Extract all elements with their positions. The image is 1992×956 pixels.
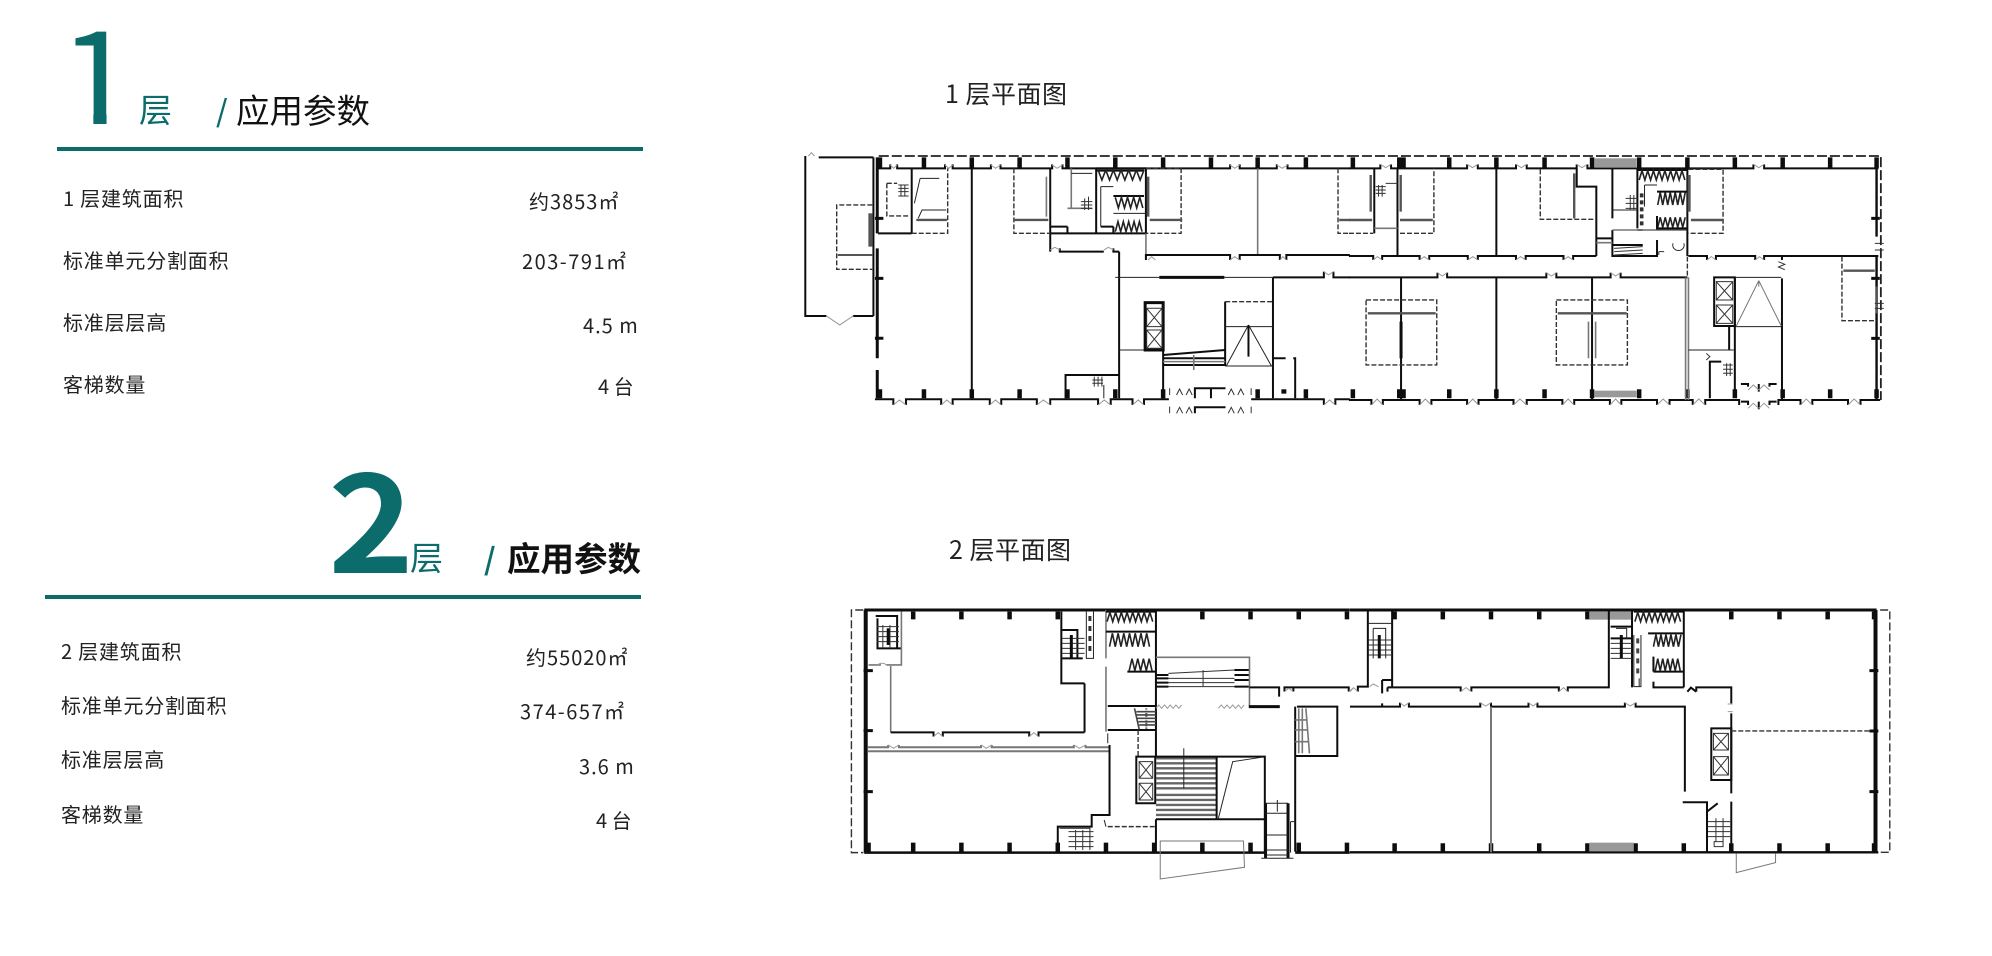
panel: floor 1 parameters xyxy=(57,32,643,400)
row: floor area label: 2 层建筑面积 xyxy=(61,636,182,665)
row: unit area value: 203-791㎡ xyxy=(522,246,628,275)
slash: / xyxy=(216,87,228,131)
row: floor area value: 约55020㎡ xyxy=(526,642,628,671)
row: floor height label: 标准层层高 xyxy=(63,307,167,336)
title: floor 2 plan: 2 层平面图 xyxy=(949,531,1071,567)
heading rule xyxy=(57,147,643,151)
row: floor area value: 约3853㎡ xyxy=(529,186,619,215)
panel: floor 2 parameters xyxy=(45,418,641,834)
row: elevators label: 客梯数量 xyxy=(61,799,144,828)
heading: application parameters: 应用参数 xyxy=(507,532,641,581)
floor character: 层 xyxy=(139,84,172,132)
row: floor area label: 1 层建筑面积 xyxy=(63,183,184,212)
plan 1 east half xyxy=(1349,156,1884,409)
floor plan 1 xyxy=(805,153,1884,413)
floor character: 层 xyxy=(410,532,443,580)
row: unit area label: 标准单元分割面积 xyxy=(63,245,229,274)
row: unit area value: 374-657㎡ xyxy=(520,696,626,725)
heading rule xyxy=(45,595,641,599)
row: floor height value: 3.6 m xyxy=(579,751,635,780)
row: floor height value: 4.5 m xyxy=(583,310,639,339)
row: elevators label: 客梯数量 xyxy=(63,369,146,398)
row: elevators value: 4 台 xyxy=(598,371,634,400)
title: floor 1 plan: 1 层平面图 xyxy=(945,75,1067,111)
slash: / xyxy=(484,535,496,579)
plan 2 east half xyxy=(1350,610,1890,873)
row: elevators value: 4 台 xyxy=(596,805,632,834)
row: floor height label: 标准层层高 xyxy=(61,744,165,773)
plan 2 west half xyxy=(851,610,1353,879)
floor plan 2 xyxy=(851,610,1890,879)
plan 1 west half xyxy=(805,153,1350,413)
row: unit area label: 标准单元分割面积 xyxy=(61,690,227,719)
big number 2: 2 xyxy=(328,418,414,612)
heading: application parameters: 应用参数 xyxy=(236,84,370,133)
